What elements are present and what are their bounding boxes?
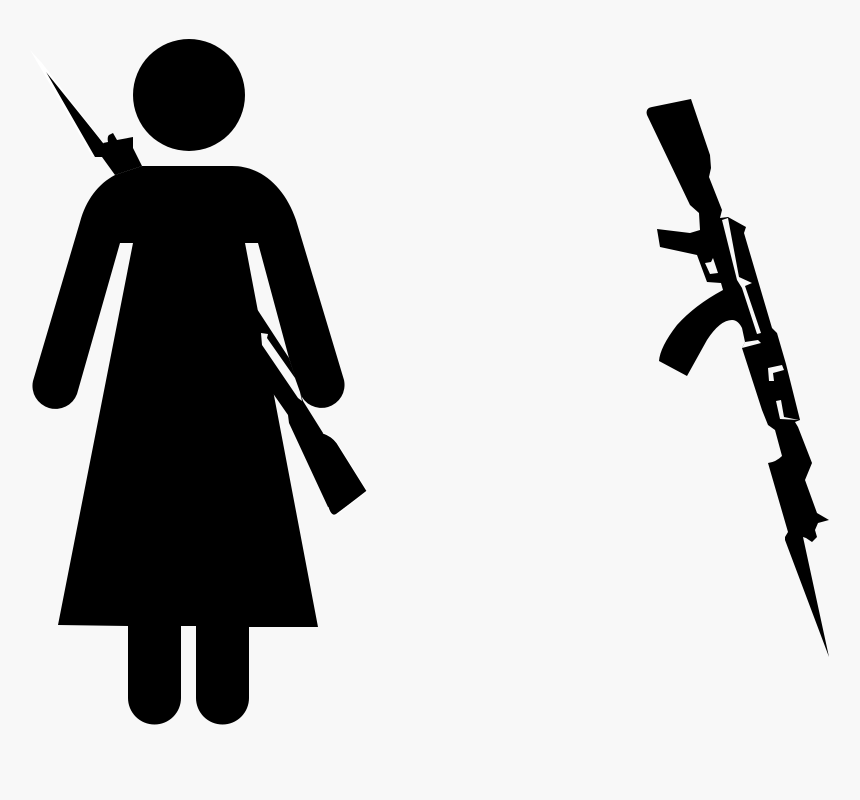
- rifle silhouette: [647, 99, 829, 657]
- figure: woman carrying rifle: [30, 39, 367, 724]
- rifle cut-out details: [705, 218, 799, 420]
- icon: slung rifle stock: [253, 295, 367, 515]
- icon: slung rifle bayonet: [30, 50, 142, 175]
- icon: body with arms and dress: [32, 166, 345, 724]
- icon: standalone rifle: [647, 99, 829, 657]
- icon: head: [133, 39, 245, 151]
